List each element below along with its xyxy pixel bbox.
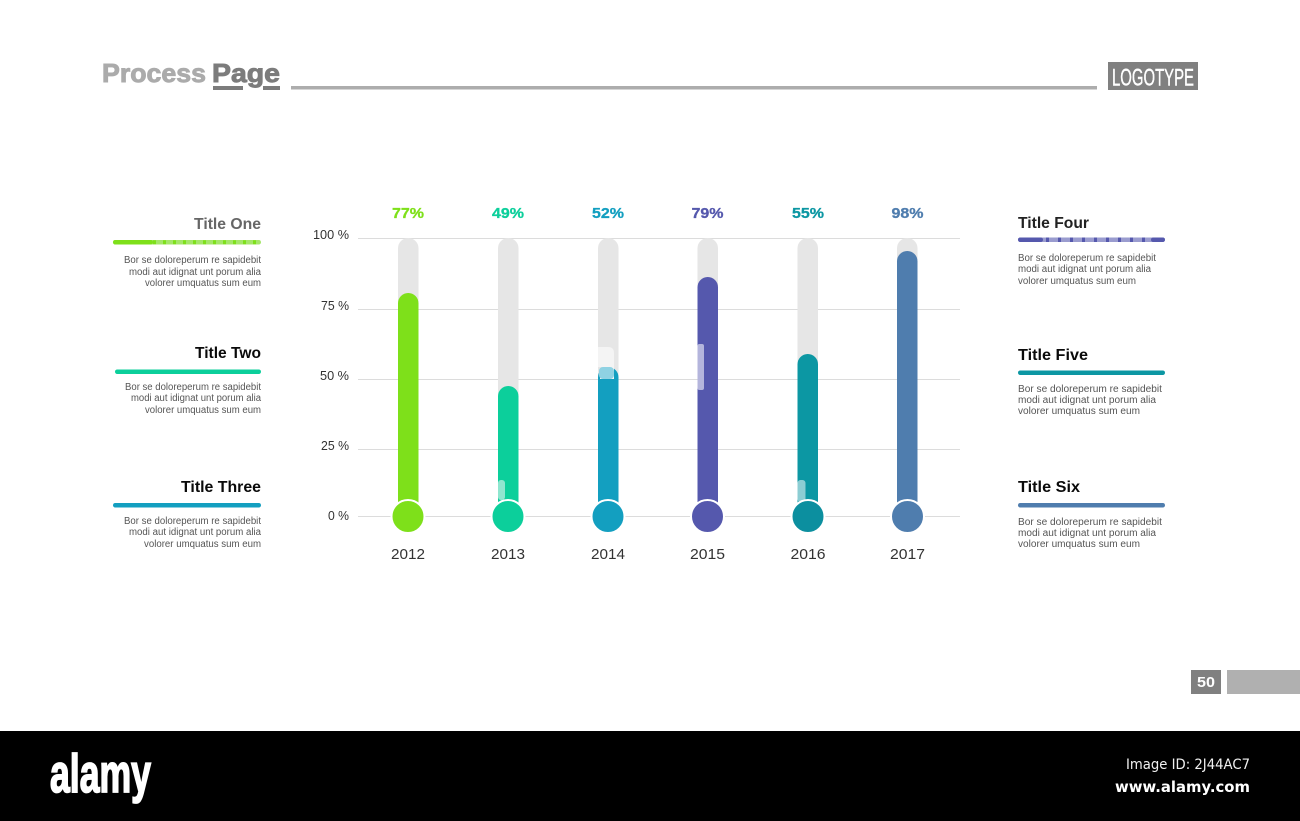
legend item: Title Five: modi aut idignat unt porum alia	[1018, 395, 1156, 406]
bar 2013: 49%	[492, 205, 524, 222]
legend item: Title One: volorer umquatus sum eum	[145, 278, 261, 289]
legend item: Title One	[113, 216, 261, 289]
legend item: Title Four: modi aut idignat unt porum alia	[1018, 264, 1151, 275]
y axis labels: 75 %	[321, 298, 349, 313]
page number	[1191, 670, 1221, 694]
legend item: Title One: Bor se doloreperum re sapidebit	[124, 255, 261, 266]
bar chart	[313, 205, 960, 563]
page tab	[1227, 670, 1300, 694]
bar 2016: 2016	[790, 546, 826, 563]
legend item: Title Six: volorer umquatus sum eum	[1018, 539, 1140, 550]
bar 2013: 2013	[491, 546, 525, 563]
page number: 50	[1197, 674, 1215, 691]
header rule	[291, 86, 1097, 90]
bar 2013	[491, 205, 525, 563]
bar 2015: 2015	[690, 546, 725, 563]
bar 2015: 79%	[692, 205, 724, 222]
legend item: Title Five: Title Five	[1018, 347, 1088, 364]
legend item: Title Three: Bor se doloreperum re sapidebit	[124, 516, 261, 527]
legend item: Title Five: volorer umquatus sum eum	[1018, 406, 1140, 417]
legend item: Title Two: modi aut idignat unt porum alia	[131, 393, 261, 404]
bar 2016: 55%	[792, 205, 824, 222]
watermark logo: alamy	[50, 744, 151, 804]
panel: right legend	[1018, 215, 1165, 550]
bar 2017: 98%	[892, 205, 924, 222]
panel: left legend	[113, 216, 261, 550]
legend item: Title Two	[115, 345, 261, 416]
legend item: Title Two: Bor se doloreperum re sapidebit	[125, 382, 261, 393]
y axis labels: 50 %	[320, 368, 349, 383]
legend item: Title Three: volorer umquatus sum eum	[144, 539, 261, 550]
bar 2012: 2012	[391, 546, 425, 563]
legend item: Title Four: Bor se doloreperum re sapidebit	[1018, 253, 1156, 264]
bar 2014: 2014	[591, 546, 625, 563]
y axis labels: 100 %	[313, 227, 349, 242]
legend item: Title Four	[1018, 215, 1165, 287]
logotype	[1108, 62, 1198, 92]
legend item: Title Six: Bor se doloreperum re sapidebit	[1018, 517, 1162, 528]
title: Process	[102, 58, 206, 88]
legend item: Title Six: modi aut idignat unt porum alia	[1018, 528, 1156, 539]
bar 2012: 77%	[392, 205, 424, 222]
legend item: Title Three	[113, 479, 261, 550]
legend item: Title Five	[1018, 347, 1165, 417]
title	[102, 58, 280, 90]
title: Page	[212, 58, 280, 88]
bar 2012	[391, 205, 425, 563]
y axis labels	[313, 227, 349, 523]
legend item: Title Two: volorer umquatus sum eum	[145, 405, 261, 416]
legend item: Title Four: volorer umquatus sum eum	[1018, 276, 1136, 287]
legend item: Title Six: Title Six	[1018, 479, 1080, 496]
website: www.alamy.com	[1115, 778, 1250, 796]
legend item: Title One: Title One	[194, 216, 261, 233]
footer band	[0, 731, 1300, 821]
image id: Image ID: 2J44AC7	[1126, 757, 1250, 773]
y axis labels: 25 %	[321, 438, 349, 453]
bar 2015	[690, 205, 725, 563]
legend item: Title One: modi aut idignat unt porum alia	[129, 267, 261, 278]
bar 2014: 52%	[592, 205, 624, 222]
legend item: Title Two: Title Two	[195, 345, 261, 362]
legend item: Title Six	[1018, 479, 1165, 550]
legend item: Title Four: Title Four	[1018, 215, 1089, 232]
y axis labels: 0 %	[328, 508, 349, 523]
bar 2016	[790, 205, 826, 563]
bar 2014	[591, 205, 625, 563]
legend item: Title Three: Title Three	[181, 479, 261, 496]
legend item: Title Three: modi aut idignat unt porum alia	[129, 527, 261, 538]
bar 2017	[890, 205, 925, 563]
legend item: Title Five: Bor se doloreperum re sapidebit	[1018, 384, 1162, 395]
logotype: LOGOTYPE	[1112, 64, 1194, 92]
bar 2017: 2017	[890, 546, 925, 563]
